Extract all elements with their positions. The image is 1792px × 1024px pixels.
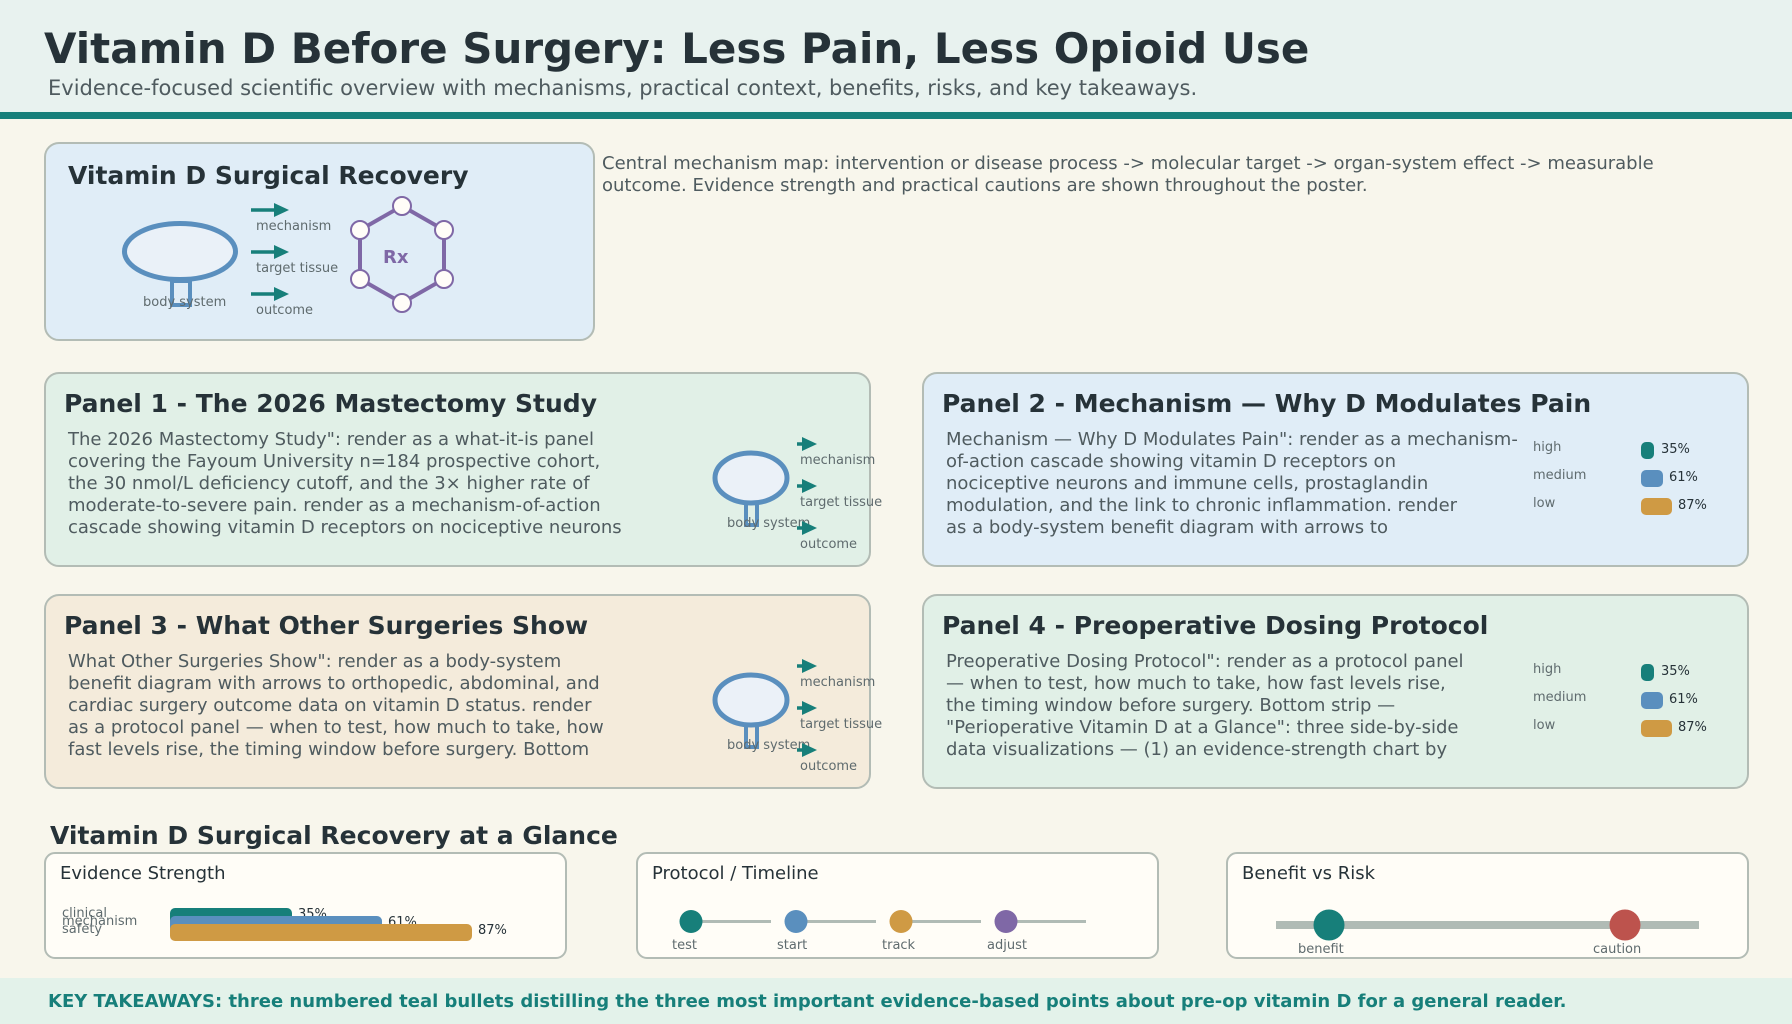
subtitle: Evidence-focused scientific overview with mechanisms, practical context, benefits, risks, and key takeaways. <box>48 76 1197 100</box>
chart card: benefit vs risk <box>1227 853 1748 958</box>
panel 4 heading: Panel 4 - Preoperative Dosing Protocol <box>942 611 1488 640</box>
panel 1: the 2026 mastectomy study <box>45 373 882 566</box>
icon: body system organ: body system <box>143 295 226 310</box>
benefit vs risk title: Benefit vs Risk <box>1242 863 1376 884</box>
arrow: target tissue <box>251 245 338 276</box>
bar chart: safety <box>62 922 102 937</box>
panel 4 evidence bars <box>1533 662 1707 737</box>
panel: hero mechanism map <box>45 143 594 340</box>
panel 2 evidence bars: 35% <box>1661 442 1690 457</box>
arrow: target tissue: target tissue <box>256 261 338 276</box>
intro text <box>602 153 1654 196</box>
panel 4 body text: "Perioperative Vitamin D at a Glance": three side-by-side <box>946 717 1459 738</box>
timeline: start <box>777 938 807 953</box>
title: Vitamin D Before Surgery: Less Pain, Less Opioid Use <box>44 24 1309 73</box>
panel 3 body-system diagram: body system <box>727 738 810 753</box>
panel 3 body text: benefit diagram with arrows to orthopedic, abdominal, and <box>68 673 600 694</box>
panel 2 evidence bars: medium <box>1533 468 1586 483</box>
timeline: adjust <box>987 938 1027 953</box>
chart card: protocol timeline <box>637 853 1158 958</box>
protocol timeline title: Protocol / Timeline <box>652 863 819 884</box>
panel 1 body text: The 2026 Mastectomy Study": render as a what-it-is panel <box>67 429 594 450</box>
panel 4 body text: the timing window before surgery. Bottom strip — <box>946 695 1395 716</box>
arrow: mechanism: mechanism <box>256 219 331 234</box>
bar chart: 61% <box>388 915 417 930</box>
panel 1 body-system diagram: body system <box>727 516 810 531</box>
panel 3 body text: cardiac surgery outcome data on vitamin D status. render <box>68 695 592 716</box>
header band <box>0 0 1792 119</box>
panel 1 body text: moderate-to-severe pain. render as a mechanism-of-action <box>68 495 601 516</box>
panel 1 body-system diagram: mechanism <box>800 453 875 468</box>
panel 1 body-system diagram: target tissue <box>800 495 882 510</box>
bar chart: mechanism <box>62 914 137 929</box>
bar chart: 87% <box>478 923 507 938</box>
panel 4 body text: Preoperative Dosing Protocol": render as a protocol panel <box>946 651 1464 672</box>
arrow: mechanism <box>251 203 331 234</box>
panel 2 body text: as a body-system benefit diagram with arrows to <box>946 517 1388 538</box>
panel 3: what other surgeries show <box>45 595 882 788</box>
panel 2 body text: nociceptive neurons and immune cells, prostaglandin <box>946 473 1428 494</box>
intro text: outcome. Evidence strength and practical cautions are shown throughout the poster. <box>602 175 1368 196</box>
panel 3 body-system diagram: mechanism <box>800 675 875 690</box>
panel 2: mechanism <box>923 373 1748 566</box>
panel 3 body text: fast levels rise, the timing window before surgery. Bottom <box>68 739 589 760</box>
panel 1 body text: the 30 nmol/L deficiency cutoff, and the 3× higher rate of <box>68 473 590 494</box>
key takeaways footer <box>0 978 1792 1024</box>
panel 3 body text <box>68 651 604 760</box>
panel 3 body-system diagram: outcome <box>800 759 857 774</box>
panel 4 evidence bars: 61% <box>1669 692 1698 707</box>
panel 4 body text: — when to test, how much to take, how fast levels rise, <box>946 673 1446 694</box>
panel 2 evidence bars: 87% <box>1678 498 1707 513</box>
arrow: outcome: outcome <box>256 303 313 318</box>
panel 3 body-system diagram: target tissue <box>800 717 882 732</box>
benefit risk scale: caution <box>1593 942 1641 957</box>
panel 3 heading: Panel 3 - What Other Surgeries Show <box>64 611 588 640</box>
panel 4 evidence bars: 35% <box>1661 664 1690 679</box>
panel 1 body-system diagram: outcome <box>800 537 857 552</box>
panel 2 evidence bars <box>1533 440 1707 515</box>
arrow: outcome <box>251 287 313 318</box>
panel 2 evidence bars: low <box>1533 496 1556 511</box>
panel 4 body text <box>946 651 1464 760</box>
panel 3 body-system diagram <box>715 659 882 774</box>
bar chart: 35% <box>298 907 327 922</box>
panel 4 evidence bars: 87% <box>1678 720 1707 735</box>
icon: body system organ <box>124 224 236 310</box>
benefit risk scale <box>1276 910 1699 957</box>
panel 3 body text: What Other Surgeries Show": render as a body-system <box>68 651 561 672</box>
evidence strength title: Evidence Strength <box>60 863 226 884</box>
hero heading: Vitamin D Surgical Recovery <box>68 161 469 190</box>
panel 2 heading: Panel 2 - Mechanism — Why D Modulates Pain <box>942 389 1591 418</box>
panel 1 body text: cascade showing vitamin D receptors on nociceptive neurons <box>68 517 622 538</box>
timeline: track <box>882 938 916 953</box>
panel 4: preoperative dosing protocol <box>923 595 1748 788</box>
bar chart <box>62 906 507 941</box>
benefit risk scale: benefit <box>1298 942 1344 957</box>
panel 4 evidence bars: low <box>1533 718 1556 733</box>
timeline: test <box>672 938 697 953</box>
panel 4 body text: data visualizations — (1) an evidence-strength chart by <box>946 739 1447 760</box>
panel 4 evidence bars: medium <box>1533 690 1586 705</box>
panel 2 body text <box>946 429 1518 538</box>
panel 2 evidence bars: 61% <box>1669 470 1698 485</box>
icon: Rx molecule hexagon: Rx <box>383 247 409 268</box>
chart card: evidence strength <box>45 853 566 958</box>
panel 1 body text: covering the Fayoum University n=184 prospective cohort, <box>68 451 600 472</box>
strip heading: Vitamin D Surgical Recovery at a Glance <box>50 821 618 850</box>
icon: Rx molecule hexagon <box>351 197 453 312</box>
key takeaways footer: KEY TAKEAWAYS: three numbered teal bullets distilling the three most important evidence-based points about pre-op vitamin D for a general reader. <box>48 991 1566 1012</box>
panel 4 evidence bars: high <box>1533 662 1561 677</box>
bar chart: clinical <box>62 906 107 921</box>
panel 2 body text: of-action cascade showing vitamin D receptors on <box>946 451 1396 472</box>
panel 1 heading: Panel 1 - The 2026 Mastectomy Study <box>64 389 597 418</box>
panel 1 body text <box>67 429 622 538</box>
timeline <box>672 910 1086 953</box>
panel 2 body text: Mechanism — Why D Modulates Pain": render as a mechanism- <box>946 429 1518 450</box>
intro text: Central mechanism map: intervention or disease process -> molecular target -> organ-system effect -> measurable <box>602 153 1654 174</box>
panel 1 body-system diagram <box>715 437 882 552</box>
panel 2 evidence bars: high <box>1533 440 1561 455</box>
panel 2 body text: modulation, and the link to chronic inflammation. render <box>946 495 1458 516</box>
panel 3 body text: as a protocol panel — when to test, how much to take, how <box>68 717 604 738</box>
